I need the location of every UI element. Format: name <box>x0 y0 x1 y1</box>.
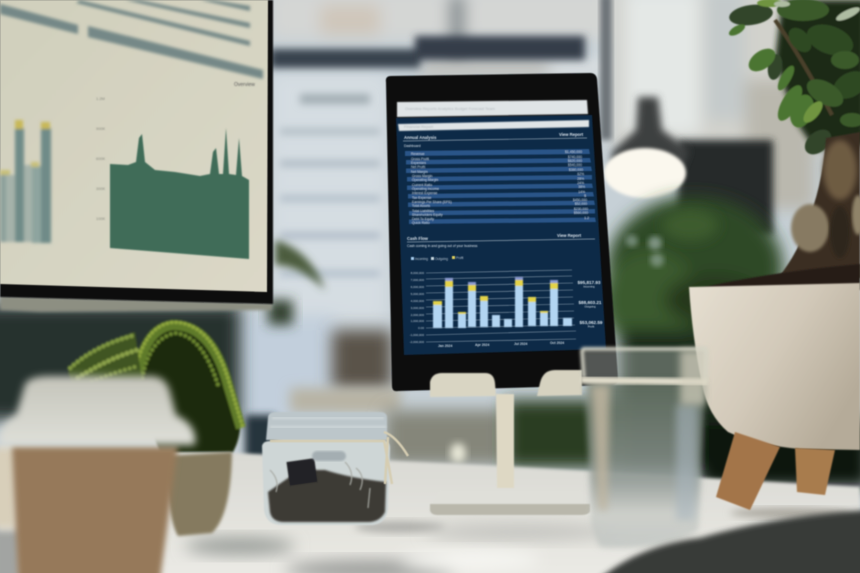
chart date labels: Jan 2024 <box>438 344 452 348</box>
monitor axis labels: 600K <box>96 156 106 161</box>
financial metrics table: Tax Expense <box>412 196 432 200</box>
financial metrics table: 14% <box>578 190 585 194</box>
cash flow heading: Cash coming in and going out of your business <box>407 244 478 248</box>
water glass <box>582 349 706 547</box>
financial metrics table: 28% <box>577 177 584 181</box>
financial metrics table: Earnings Per Share (EPS) <box>412 200 452 204</box>
financial metrics table: Total Assets <box>412 204 430 208</box>
cup sleeve <box>12 446 178 573</box>
dark fabric in foreground <box>598 510 860 573</box>
cash flow gridlines and axis labels: 1,000,000 <box>411 319 424 323</box>
cash flow totals: $88,603.21 <box>578 300 602 305</box>
financial metrics table: Operating Margin <box>412 178 438 182</box>
cash flow legend: Outgoing <box>435 257 448 261</box>
financial metrics table: Gross Margin <box>412 174 432 178</box>
financial metrics table: $540,000 <box>568 163 582 167</box>
chart date labels <box>438 341 564 348</box>
white plant pot <box>689 283 860 450</box>
bonsai foliage <box>727 0 860 159</box>
chart date labels: Oct 2024 <box>550 341 564 345</box>
financial metrics table: $560,000 <box>574 211 588 215</box>
financial metrics table: $1,450,000 <box>565 150 582 154</box>
cash flow stacked bar chart <box>433 277 572 328</box>
financial metrics table: 24% <box>577 181 584 185</box>
financial metrics table: 1.2 <box>584 216 589 220</box>
small plant pot <box>165 452 232 536</box>
financial metrics table: Shareholders Equity <box>412 213 443 217</box>
financial metrics table: Expenses <box>411 161 426 165</box>
financial metrics table: $230,000 <box>574 207 588 211</box>
cash flow legend: Profit <box>456 256 464 260</box>
cash flow legend: Incoming <box>415 257 428 261</box>
glass jar of binder clips <box>262 412 408 525</box>
stand right arm <box>537 370 582 396</box>
financial metrics table: Gross Profit <box>411 157 429 161</box>
monitor axis labels: 900K <box>96 126 106 131</box>
financial metrics table: Net Profit <box>411 165 425 169</box>
small green plant <box>68 320 243 452</box>
financial metrics table: Interest Expense <box>412 191 438 195</box>
cash flow gridlines and axis labels: 3,000,000 <box>411 306 424 310</box>
cash flow totals: Profit <box>588 324 594 328</box>
cup lid <box>0 376 195 445</box>
monitor axis labels: 1.2M <box>96 96 105 101</box>
tablet stand <box>428 370 590 515</box>
financial metrics table: $380,000 <box>569 168 583 172</box>
annual analysis heading: Annual Analysis <box>404 135 437 140</box>
cash flow totals: Outgoing <box>584 304 596 308</box>
financial metrics table: $52,000 <box>575 202 587 206</box>
financial metrics table: Operating Income <box>412 187 439 191</box>
monitor bar chart <box>0 120 51 243</box>
stand left arm <box>430 373 496 397</box>
jute twine <box>270 432 408 484</box>
financial metrics table: 38% <box>578 185 585 189</box>
cash flow heading: Cash Flow <box>407 236 429 241</box>
cash flow gridlines and axis labels: 7,000,000 <box>411 278 424 282</box>
cash flow gridlines and axis labels: 4,000,000 <box>411 299 424 303</box>
financial metrics table: Current Ratio <box>412 183 432 187</box>
desk surface <box>0 445 860 573</box>
financial metrics table: $ <box>584 194 586 198</box>
cash flow gridlines and axis labels: 2,000,000 <box>411 313 424 317</box>
cash flow heading: View Report <box>557 233 582 238</box>
stand column <box>496 394 514 488</box>
financial metrics table: Net Margin <box>411 170 428 174</box>
chart date labels: Apr 2024 <box>475 343 489 347</box>
cash flow totals: Incoming <box>583 284 595 288</box>
cash flow gridlines and axis labels: 5,000,000 <box>411 292 424 296</box>
cash flow gridlines and axis labels: -1,000,000 <box>410 333 424 337</box>
monitor axis labels <box>96 82 255 221</box>
financial metrics table: $740,000 <box>568 155 582 159</box>
monitor with analytics charts <box>0 0 273 312</box>
cash flow gridlines and axis labels <box>410 270 576 344</box>
coffee cup <box>0 376 195 573</box>
cash flow gridlines and axis labels: 6,000,000 <box>411 285 424 289</box>
cash flow gridlines and axis labels: 8,000,000 <box>411 271 424 275</box>
distant window and wall right of tablet <box>610 0 860 210</box>
tablet body <box>386 73 618 391</box>
monitor axis labels: 300K <box>96 186 106 191</box>
stand base <box>428 490 590 515</box>
chart date labels: Jul 2024 <box>514 342 527 346</box>
cash flow legend <box>411 256 464 261</box>
tablet navigation bars: Financial Report <box>404 124 434 129</box>
monitor screen <box>0 0 268 292</box>
tablet dashboard screen <box>396 115 606 355</box>
left background shadow under monitor <box>0 305 240 420</box>
bonsai trunk and roots <box>700 132 860 290</box>
financial metrics table: 62% <box>577 172 584 176</box>
pot leg: right <box>795 448 835 495</box>
financial metrics table: Total Liabilities <box>412 209 434 213</box>
financial metrics table: Revenue <box>411 152 425 156</box>
tablet with dashboard <box>386 73 618 391</box>
financial metrics table: $620,000 <box>568 159 582 163</box>
financial metrics table: $450,000 <box>573 198 587 202</box>
financial metrics table: Debt To Equity <box>412 217 434 221</box>
binder clip <box>286 458 318 486</box>
pot leg: left <box>716 432 780 510</box>
monitor axis labels: Overview <box>234 82 255 88</box>
monitor stand strip <box>0 296 272 312</box>
tablet navigation bars: Overview Reports Analytics Budget Forecast Team <box>405 106 496 111</box>
cash flow totals: $53,062.59 <box>580 320 603 325</box>
annual analysis heading: View Report <box>559 132 584 137</box>
financial metrics table: Quick Ratio <box>412 221 430 225</box>
monitor axis labels: 100K <box>96 216 106 221</box>
cash flow heading <box>407 233 595 248</box>
cash flow gridlines and axis labels: -2,000,000 <box>410 340 424 344</box>
jar contents <box>268 470 386 522</box>
cash flow totals: $95,817.93 <box>578 280 601 285</box>
financial metrics table <box>405 149 596 225</box>
monitor header bands <box>0 0 263 79</box>
monitor bezel <box>0 0 273 304</box>
annual analysis heading: Dashboard <box>404 144 421 148</box>
annual analysis heading <box>403 132 587 148</box>
monitor area chart <box>110 128 249 259</box>
cash flow totals <box>578 280 603 328</box>
cash flow gridlines and axis labels: 0.00 <box>418 326 424 330</box>
tablet navigation bars <box>397 100 589 131</box>
jar neck and lid <box>266 412 387 440</box>
